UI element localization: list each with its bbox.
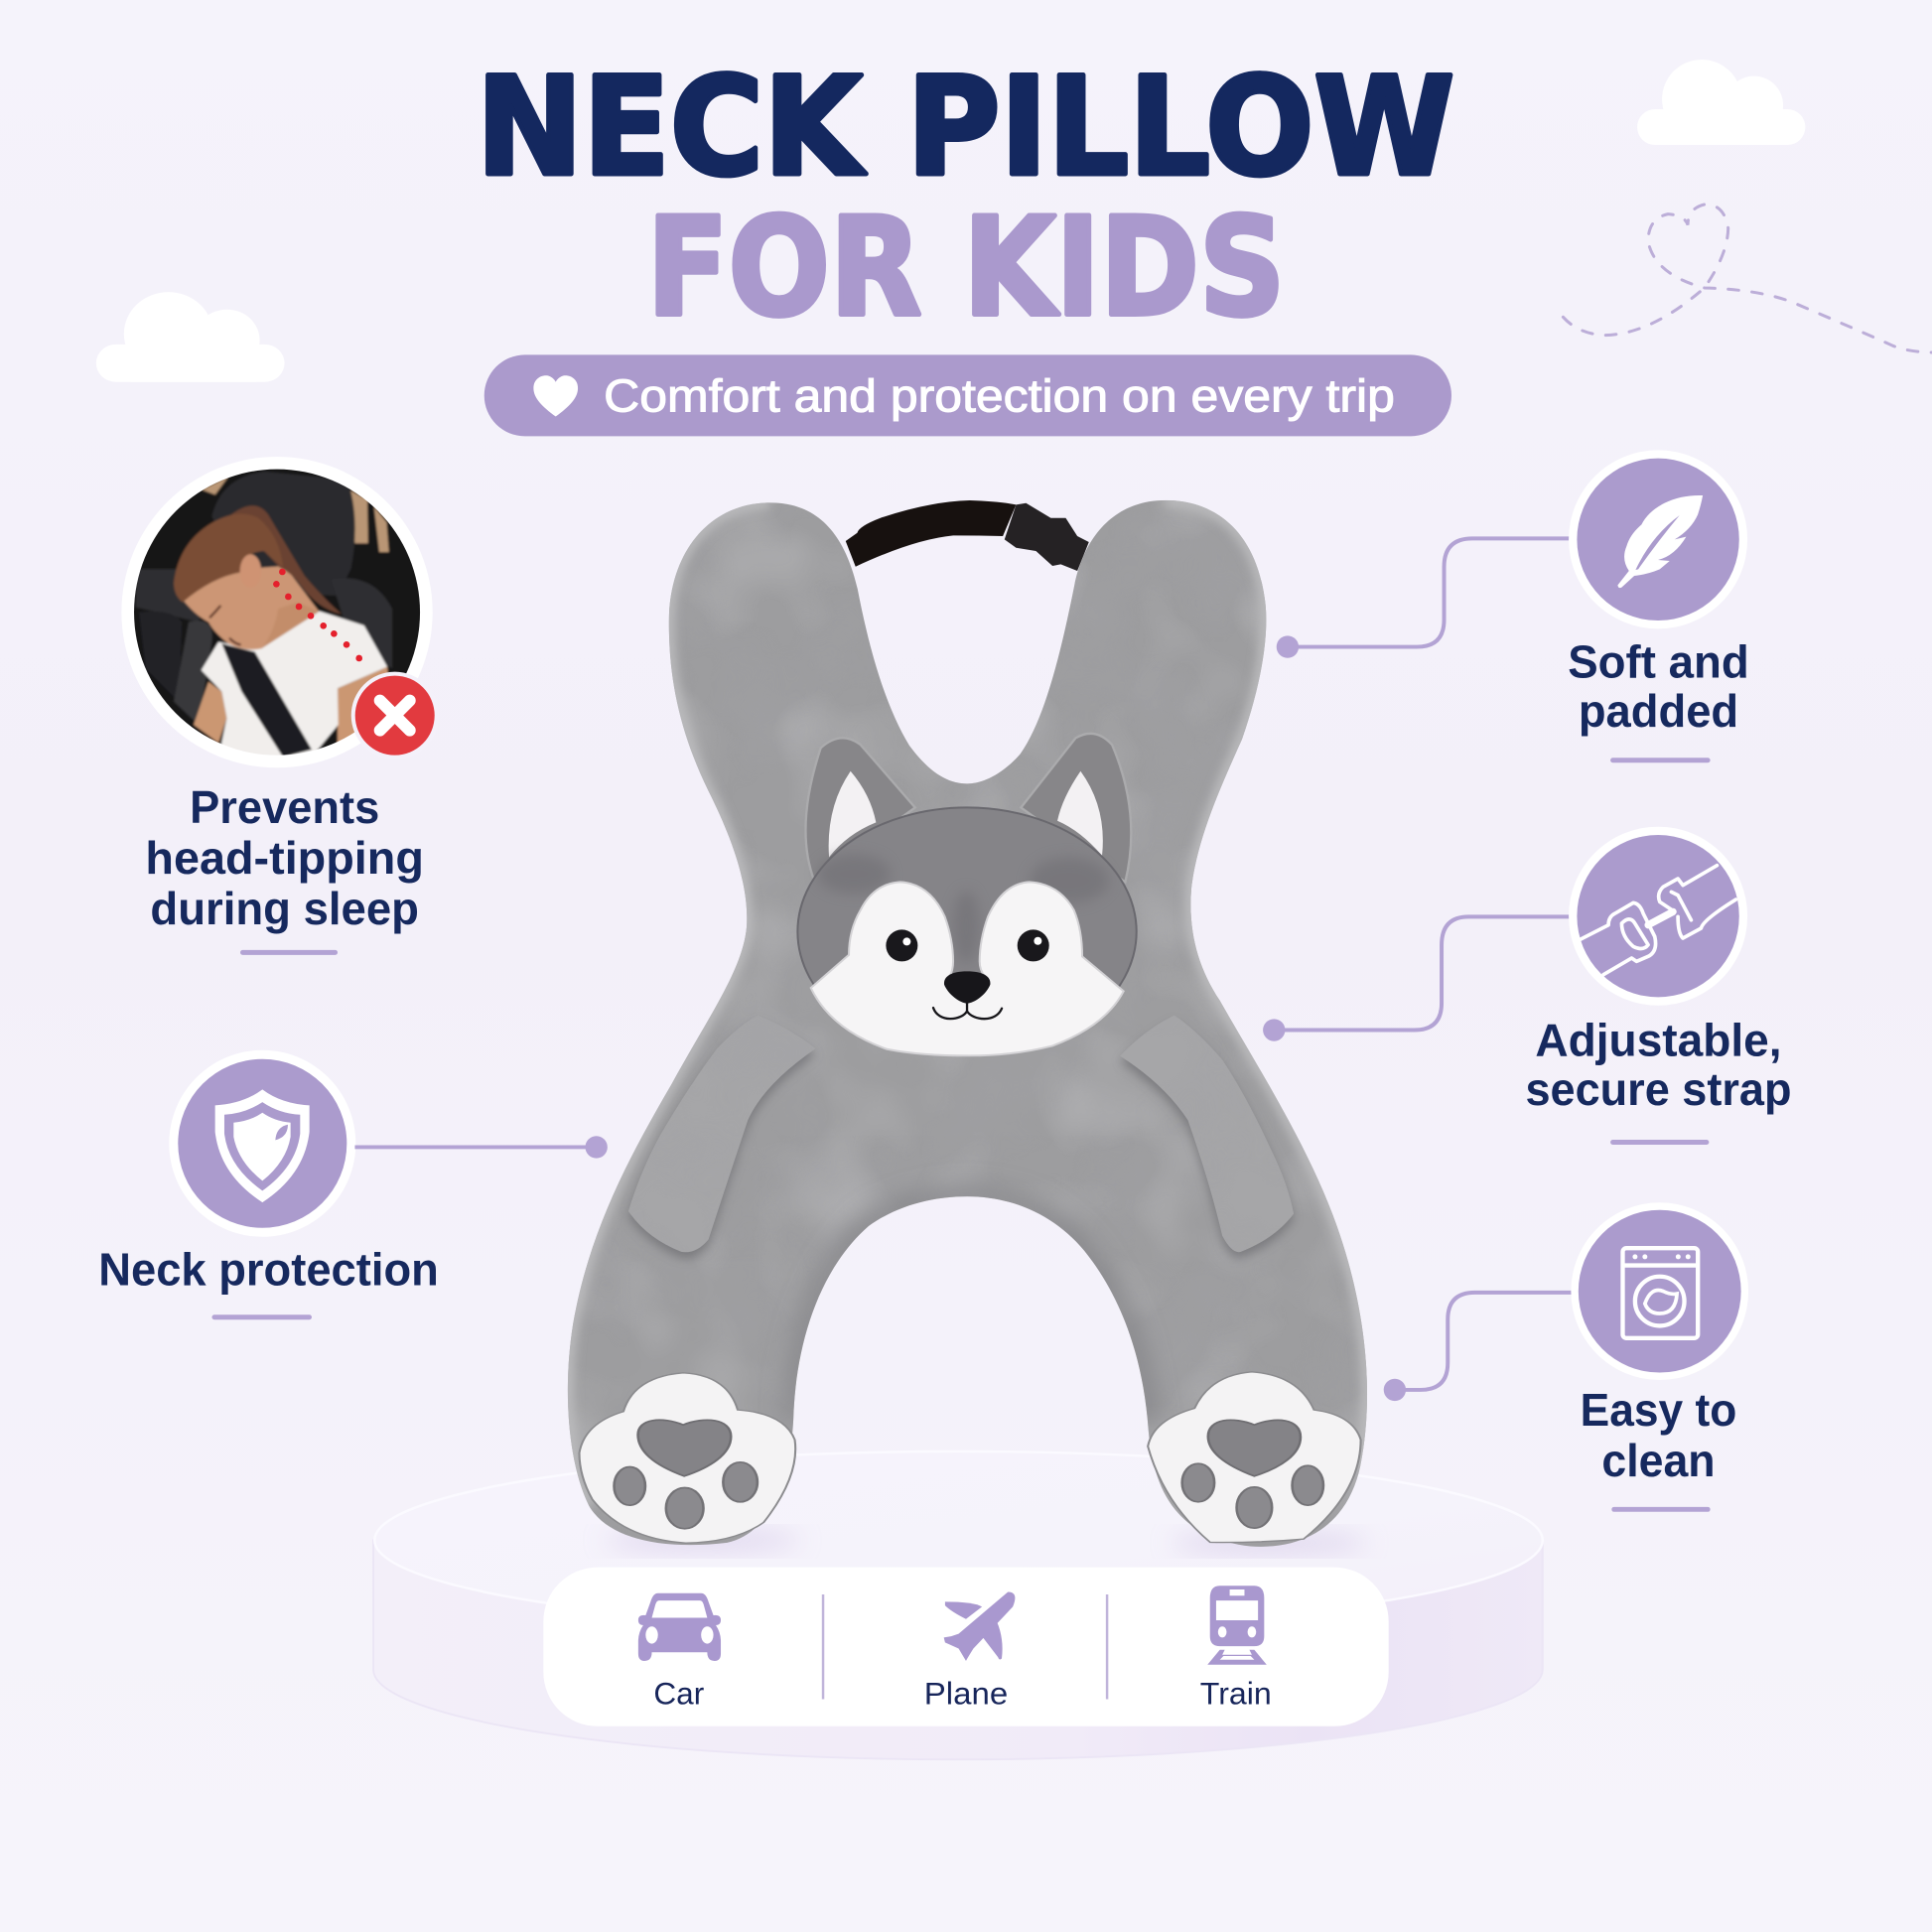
mouth: [933, 1003, 1002, 1019]
paw contact shadows: [604, 1529, 1368, 1554]
red dots: [273, 569, 362, 661]
text: prevents head-tipping: Prevents: [190, 781, 379, 833]
ponytail: [230, 505, 342, 615]
seat belt: [221, 643, 312, 758]
pillow body: [568, 500, 1367, 1547]
icon: plane: [944, 1591, 1015, 1661]
seat leather: [136, 569, 392, 668]
face and neck: [182, 566, 319, 649]
cloud: top right: [1637, 60, 1805, 145]
cloud: left: [96, 292, 285, 382]
arm shadows: [628, 1022, 1294, 1258]
text: soft and padded: padded: [1579, 685, 1738, 737]
closed eye and lips: [210, 607, 240, 644]
head: [797, 807, 1137, 1055]
subtitle text: Comfort and protection on every trip: [604, 370, 1395, 422]
interior tan trim: [202, 477, 389, 552]
headrest: [211, 472, 355, 596]
text: easy to clean: [1581, 1384, 1736, 1509]
husky face: [797, 734, 1137, 1055]
strap with buckle: [846, 500, 1089, 571]
title: [477, 49, 1454, 346]
text: neck protection: Neck protection: [98, 1243, 439, 1295]
text: adjustable strap: [1525, 1015, 1792, 1142]
text: adjustable strap: secure strap: [1525, 1063, 1792, 1115]
connector: adjustable strap: [1263, 916, 1571, 1041]
icon: washing machine: [1571, 1202, 1748, 1380]
product: husky neck pillow: [568, 500, 1367, 1547]
text: adjustable strap: Adjustable,: [1535, 1015, 1782, 1066]
platform: [373, 1451, 1543, 1759]
icon: strap buckle: [1569, 827, 1747, 1006]
dashed heart flight path: [1563, 205, 1932, 352]
left ear: [805, 738, 915, 881]
left paw: [580, 1373, 795, 1543]
title line 1: NECK PILLOW: [477, 49, 1454, 207]
label: plane: Plane: [924, 1676, 1008, 1711]
icon: train: [1207, 1586, 1267, 1665]
icon: shield: [169, 1050, 355, 1237]
text: soft and padded: Soft and: [1568, 636, 1749, 688]
subtitle pill: [484, 354, 1451, 436]
text: prevents head-tipping: during sleep: [150, 883, 419, 934]
text: soft and padded: [1568, 636, 1749, 760]
ear: [238, 552, 262, 572]
icon: feather: [1569, 450, 1747, 628]
connector: neck protection: [354, 1136, 608, 1159]
right paw: [1148, 1372, 1361, 1543]
hair cap: [174, 514, 283, 603]
right ear: [1021, 734, 1131, 882]
eyes: [886, 929, 917, 961]
callout: head-tipping photo: [121, 457, 439, 767]
inner ears: [829, 771, 1103, 857]
text: easy to clean: Easy to: [1581, 1384, 1736, 1436]
nose: [944, 971, 990, 1004]
text: prevents head-tipping: [145, 781, 424, 952]
neck shading: [266, 604, 316, 643]
title line 2: FOR KIDS: [647, 189, 1285, 346]
white mask: [811, 882, 1124, 1055]
icon: red cross badge: [351, 672, 439, 759]
text: easy to clean: clean: [1601, 1435, 1716, 1486]
child's arms: [338, 667, 390, 752]
text: prevents head-tipping: head-tipping: [145, 832, 424, 884]
label: train: Train: [1200, 1676, 1272, 1711]
shirt: [202, 611, 387, 758]
arm flaps: [628, 1016, 1294, 1253]
icon: car: [638, 1593, 721, 1661]
panel: transport modes: [543, 1568, 1389, 1726]
head shading: [817, 854, 1109, 963]
label: car: Car: [653, 1676, 704, 1711]
connector: easy to clean: [1384, 1293, 1574, 1401]
icon: heart: [533, 375, 578, 416]
connector: soft and padded: [1277, 538, 1571, 658]
